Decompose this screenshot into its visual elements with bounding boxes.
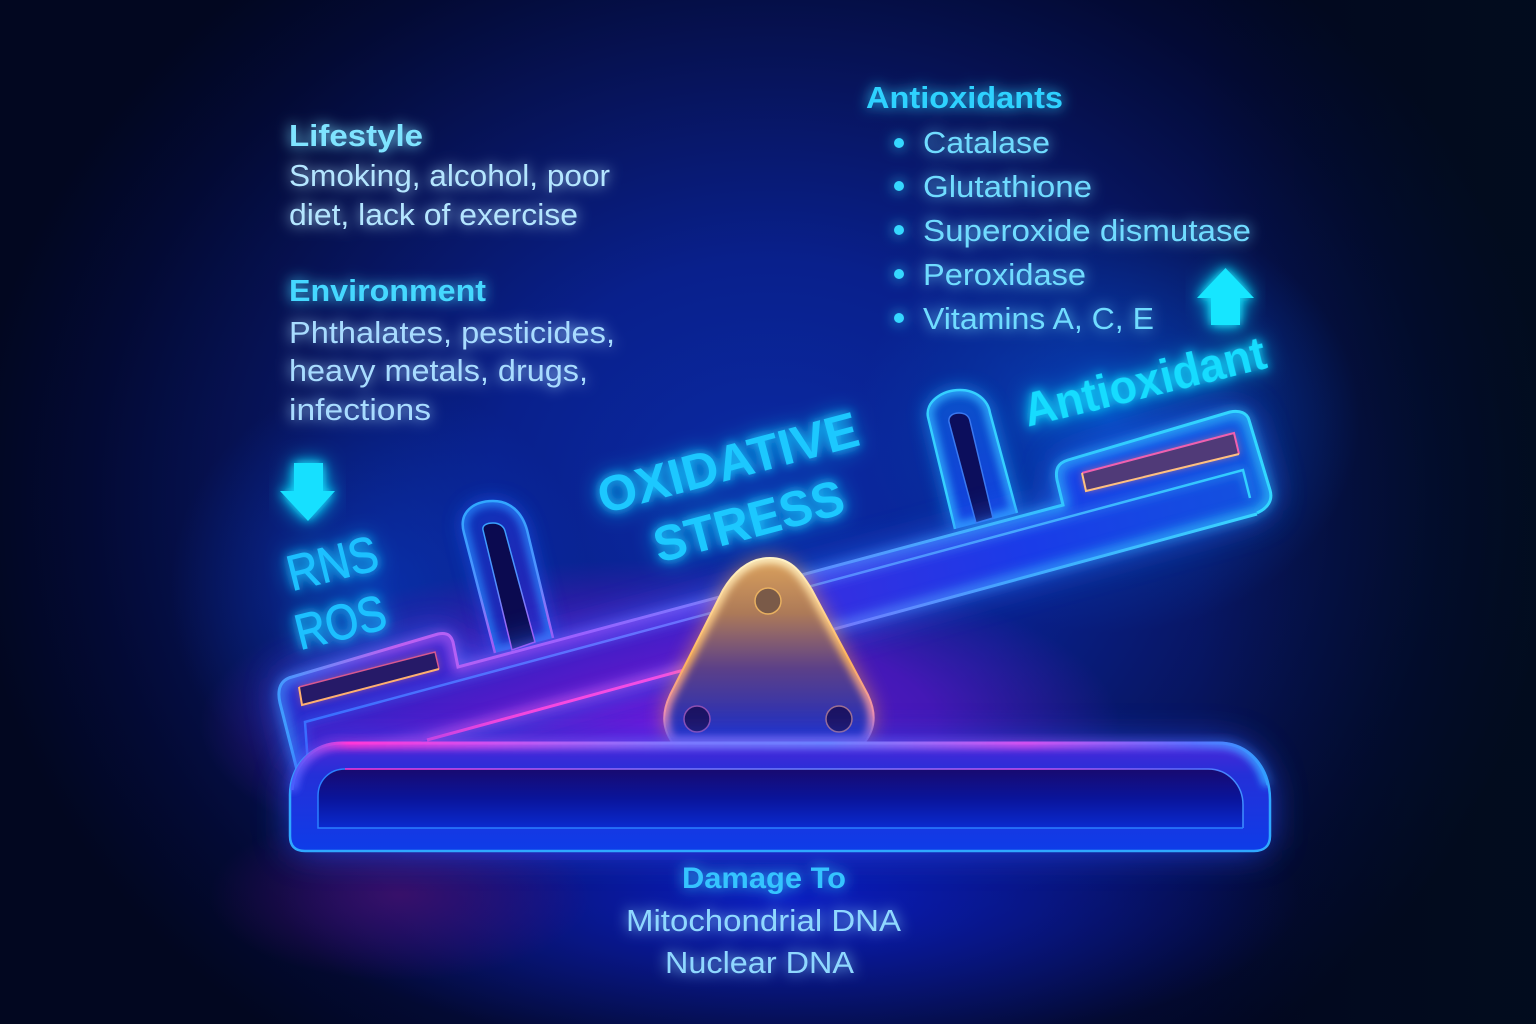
left slot — [299, 652, 439, 705]
beam under edge — [427, 514, 1257, 740]
icon: down arrow — [280, 463, 335, 521]
fulcrum — [664, 558, 874, 742]
text: Nuclear DNA: Nuclear DNA — [665, 945, 854, 980]
base inner recess — [318, 769, 1243, 828]
label: Antioxidant: Antioxidant — [1018, 326, 1271, 437]
fulcrum hole: left — [684, 706, 710, 732]
heading: Damage To: Damage To — [682, 862, 846, 895]
seesaw pillar: right — [928, 390, 1017, 529]
heading: Antioxidants: Antioxidants — [866, 80, 1063, 115]
panel: damage — [626, 862, 901, 980]
heading: Environment: Environment — [289, 273, 486, 308]
list item: Vitamins: Vitamins A, C, E — [923, 301, 1154, 336]
list item: Peroxidase: Peroxidase — [923, 257, 1086, 292]
panel: environment causes — [289, 273, 615, 427]
fulcrum hole: top — [755, 588, 781, 614]
label: RNS and ROS — [281, 525, 392, 661]
list item: Glutathione: Glutathione — [923, 169, 1092, 204]
base platform — [290, 743, 1270, 851]
base top highlight — [292, 743, 1268, 790]
text: lifestyle line 1: Smoking, alcohol, poor — [289, 158, 610, 193]
icon: up arrow — [1197, 268, 1254, 325]
fulcrum hole: right — [826, 706, 852, 732]
beam inner line — [305, 470, 1250, 765]
panel: lifestyle causes — [289, 118, 610, 232]
text: environment line 1: Phthalates, pesticides, — [289, 315, 615, 350]
text: environment line 3: infections — [289, 392, 431, 427]
heading: OXIDATIVE STRESS — [591, 401, 865, 574]
panel: antioxidants list — [866, 80, 1251, 336]
text: OXIDATIVE: OXIDATIVE — [591, 401, 865, 525]
text: lifestyle line 2: diet, lack of exercise — [289, 197, 578, 232]
text: Mitochondrial DNA: Mitochondrial DNA — [626, 903, 901, 938]
right slot — [1082, 433, 1239, 491]
heading: Lifestyle: Lifestyle — [289, 118, 423, 153]
text: ROS: ROS — [289, 584, 392, 661]
seesaw pillar: left — [463, 501, 553, 653]
text: RNS: RNS — [281, 525, 384, 602]
text: environment line 2: heavy metals, drugs, — [289, 353, 588, 388]
text: STRESS: STRESS — [647, 469, 850, 574]
beam lower band — [305, 597, 770, 765]
seesaw beam — [279, 411, 1271, 770]
list item: Superoxide dismutase: Superoxide dismutase — [923, 213, 1251, 248]
list item: Catalase: Catalase — [923, 125, 1050, 160]
